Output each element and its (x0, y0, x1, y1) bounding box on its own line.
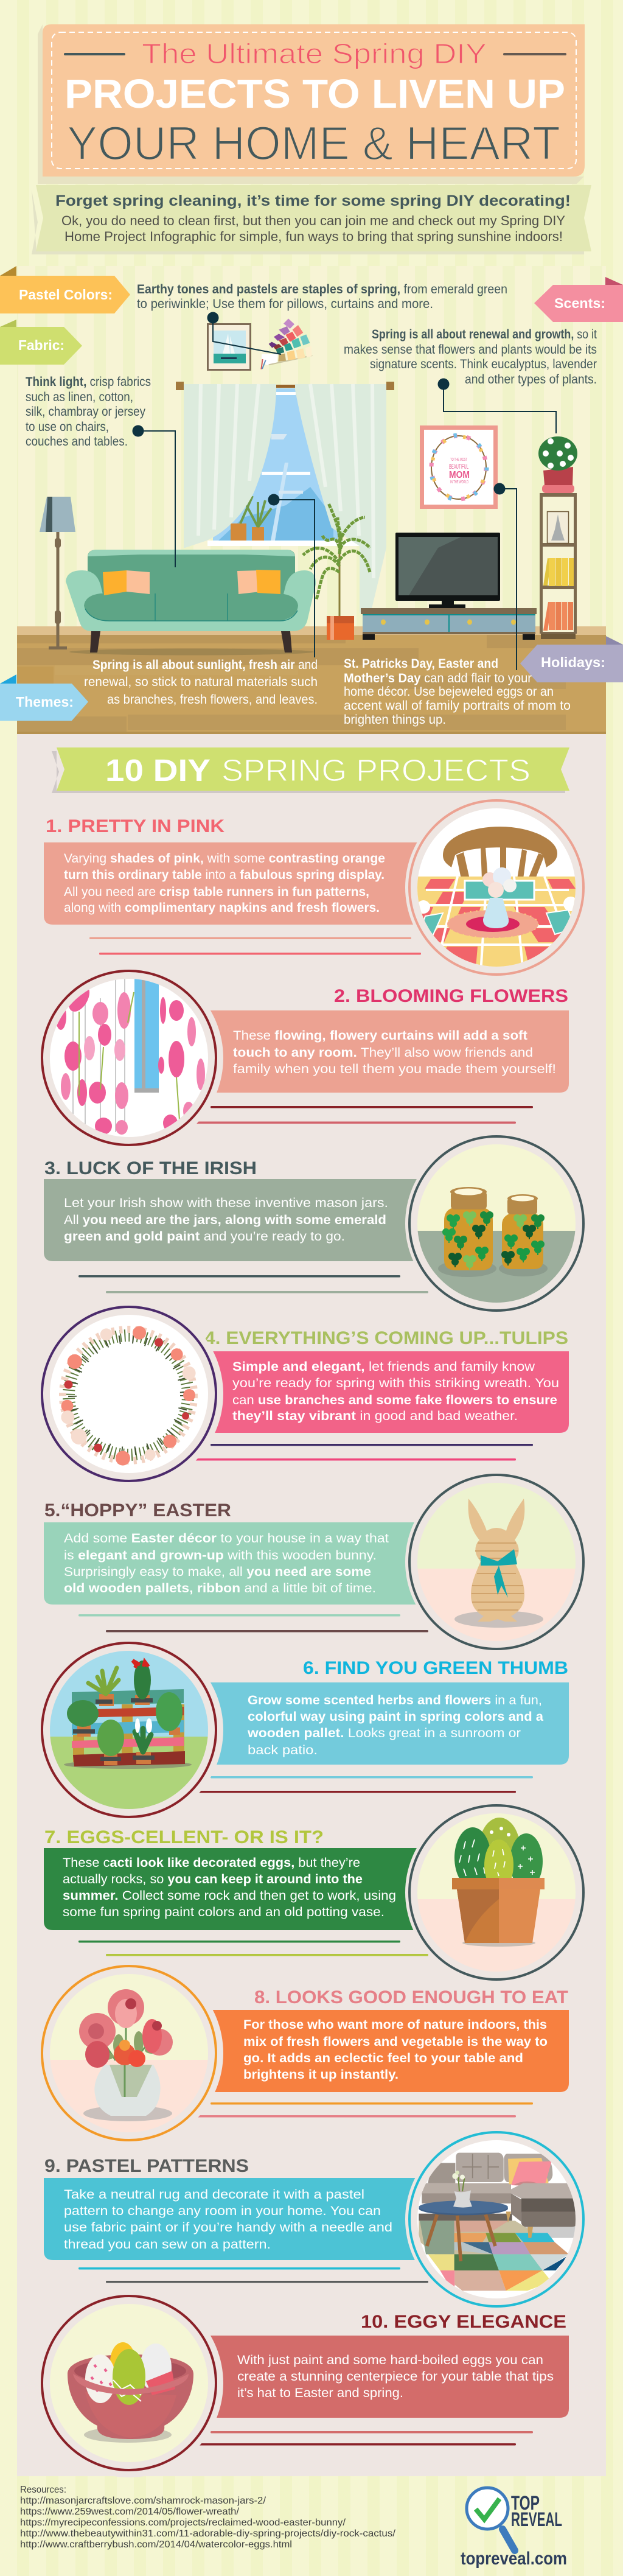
tab: pastel colors (0, 266, 130, 313)
project 9 card (44, 2178, 426, 2260)
tab: scents (534, 277, 623, 322)
text: scents: and other types of plants. (465, 372, 597, 387)
project 7 text: These cacti look like decorated eggs, but they’re (63, 1855, 360, 1870)
project 9 heading: 9. PASTEL PATTERNS (44, 2156, 249, 2176)
tab: holidays (520, 636, 623, 682)
text: themes: Spring is all about sunlight, fresh air and (92, 657, 318, 672)
project 1 (44, 796, 588, 979)
potted palm (303, 503, 370, 640)
project 7 (44, 1801, 588, 1984)
resources list (20, 2485, 396, 2550)
project 6 (35, 1636, 569, 1824)
text: themes: renewal, so stick to natural materials such (84, 674, 318, 689)
project 1 text: All you need are crisp table runners in fun patterns, (64, 884, 369, 899)
text: holidays: home décor. Use bejeweled eggs or an (344, 684, 554, 699)
living room wall (17, 266, 606, 626)
project 10 text: With just paint and some hard-boiled eggs you can (237, 2353, 543, 2367)
project 7 text: summer. Collect some rock and then get to work, using (63, 1888, 396, 1903)
title line 1: The Ultimate Spring DIY (142, 38, 487, 69)
logo: Top Reveal: REVEAL (511, 2508, 562, 2530)
text: fabric (26, 374, 151, 449)
project 3 text (64, 1195, 388, 1244)
text: fabric: couches and tables. (26, 434, 128, 449)
project 6 text (247, 1693, 544, 1757)
project 5 card (44, 1522, 426, 1605)
intro ribbon: Home Project Infographic for simple, fun ways to bring that spring sunshine indoors! (64, 229, 563, 244)
project 8 (35, 1959, 569, 2147)
project 7 image: cactus rocks (409, 1805, 584, 1979)
project 7 text: some fun spring paint colors and an old potting vase. (63, 1905, 385, 1919)
project 2 heading: 2. BLOOMING FLOWERS (334, 986, 568, 1006)
tab: scents: Scents: (554, 295, 605, 311)
project 4 text (232, 1359, 559, 1423)
project 9 text: Take a neutral rug and decorate it with a pastel (64, 2187, 364, 2202)
project 6 card (195, 1682, 569, 1765)
project 2 text: family when you tell them you made them yourself! (233, 1062, 556, 1076)
project 10 (35, 2289, 569, 2477)
project 10 text (237, 2353, 554, 2400)
pink framed wreath print: BEAUTIFUL (449, 463, 468, 471)
logo: Top Reveal: topreveal.com (461, 2549, 567, 2569)
project 2 text: These flowing, flowery curtains will add a soft (233, 1028, 527, 1043)
text: themes (84, 657, 318, 707)
room illustration (17, 318, 606, 734)
pink framed wreath print: MOM (449, 470, 470, 480)
project 10 heading: 10. EGGY ELEGANCE (361, 2312, 566, 2332)
text: holidays: accent wall of family portraits of mom to (344, 698, 571, 713)
project 5 heading: 5.“HOPPY” EASTER (44, 1500, 231, 1521)
resources list: Resources: (20, 2485, 66, 2495)
text: fabric: Think light, crisp fabrics (26, 374, 151, 389)
project 6 text: back patio. (248, 1743, 318, 1757)
project 8 card (195, 2010, 569, 2092)
project 7 text (63, 1855, 396, 1919)
project 8 text: For those who want more of nature indoors, this (243, 2017, 547, 2032)
project 5 text: is elegant and grown-up with this wooden bunny. (64, 1548, 377, 1563)
project 4 (35, 1300, 569, 1488)
project 4 card (195, 1351, 569, 1433)
floor lamp (40, 497, 75, 649)
project 3 card (44, 1179, 426, 1261)
project 3 image: mason jars (409, 1136, 584, 1311)
project 10 card (195, 2336, 569, 2418)
project 6 text: colorful way using paint in spring colors and a (248, 1709, 544, 1724)
text: holidays: Mother’s Day can add flair to your (344, 671, 532, 685)
window plants (231, 496, 271, 541)
project 8 heading: 8. LOOKS GOOD ENOUGH TO EAT (254, 1987, 568, 2007)
project 6 text: Grow some scented herbs and flowers in a fun, (248, 1693, 542, 1707)
project 4 text: Simple and elegant, let friends and family know (232, 1359, 535, 1374)
project 10 text: create a stunning centerpiece for your table that tips (237, 2369, 554, 2384)
project 9 image: sofa and pastel rug (409, 2132, 583, 2306)
text: holidays: St. Patricks Day, Easter and (344, 656, 498, 671)
picture frame: sailboat (208, 324, 251, 370)
project 5 text: old wooden pallets, ribbon and a little bit of time. (64, 1581, 376, 1595)
text: holidays: brighten things up. (344, 712, 446, 727)
project 3 text: green and gold paint and you’re ready to go. (64, 1229, 345, 1244)
project 6 heading: 6. FIND YOU GREEN THUMB (303, 1658, 568, 1678)
project 4 text: you’re ready for spring with this striking wreath. You (232, 1376, 559, 1390)
project 1 text: along with complimentary napkins and fresh flowers. (64, 900, 380, 915)
text: pastel colors (137, 282, 507, 311)
section banner: 10 DIY (105, 753, 211, 788)
bookshelf (540, 493, 577, 639)
text: pastel colors: to periwinkle; Use them for pillows, curtains and more. (137, 296, 433, 311)
text: scents: Spring is all about renewal and growth, so it (372, 327, 597, 341)
project 1 text (64, 851, 385, 915)
pink framed wreath print: TO THE MOST (450, 458, 467, 462)
project 9 text: pattern to change any room in your home. You can (64, 2203, 381, 2218)
project 5 text: Add some Easter décor to your house in a way that (64, 1531, 389, 1545)
paint swatch fan (261, 318, 312, 369)
text: scents: makes sense that flowers and plants would be its (344, 342, 597, 357)
project 5 image: wooden bunny (409, 1475, 584, 1649)
tab: fabric (0, 320, 82, 365)
tab: fabric: Fabric: (18, 337, 64, 353)
floor (17, 626, 606, 734)
project 2 (35, 964, 569, 1152)
project 2 text (233, 1028, 556, 1076)
project 6 text: wooden pallet. Looks great in a sunroom or (247, 1726, 521, 1740)
project 5 text (64, 1531, 389, 1595)
project 3 text: Let your Irish show with these inventive mason jars. (64, 1195, 388, 1210)
project 8 text: mix of fresh flowers and vegetable is the way to (243, 2034, 548, 2049)
project 10 image: eggs in bowl (42, 2296, 216, 2470)
curtain rod (176, 382, 394, 390)
project 7 text: actually rocks, so you can keep it around into the (63, 1872, 363, 1886)
section banner: SPRING PROJECTS (221, 753, 531, 788)
icon: magnifier with check (467, 2488, 515, 2550)
window (207, 388, 367, 546)
project 4 image: floral wreath (42, 1307, 216, 1481)
intro ribbon (32, 185, 591, 254)
project 3 text: All you need are the jars, along with some emerald (64, 1213, 386, 1227)
project 3 (44, 1132, 588, 1315)
project 6 image: pallet garden (42, 1643, 216, 1822)
project 1 card (44, 842, 426, 925)
project 9 text: thread you can sew on a pattern. (64, 2237, 271, 2252)
project 10 text: it’s hat to Easter and spring. (237, 2385, 403, 2400)
project 2 image: floral curtains (42, 971, 216, 1145)
tab: pastel colors: Pastel Colors: (19, 287, 113, 303)
title line 3: YOUR HOME & HEART (67, 116, 560, 170)
text: fabric: silk, chambray or jersey (26, 404, 145, 419)
project 8 image: bouquet in vase (42, 1966, 216, 2140)
sofa (66, 550, 316, 655)
text: scents (344, 327, 597, 387)
project 7 card (44, 1848, 426, 1930)
logo: Top Reveal: TOP (511, 2492, 540, 2514)
project 9 text: use fabric paint or if you’re handy with a needle and (64, 2220, 392, 2235)
resources list: http://www.thebeautywithin31.com/11-adorable-diy-spring-projects/diy-rock-cactus/ (20, 2529, 396, 2539)
project 9 text (64, 2187, 392, 2252)
text: fabric: such as linen, cotton, (26, 390, 133, 404)
project 1 image: table setting (409, 800, 584, 975)
project 4 heading: 4. EVERYTHING’S COMING UP...TULIPS (204, 1328, 568, 1348)
project 5 text: Surprisingly easy to make, all you need are some (64, 1564, 371, 1579)
flower pot on shelf (538, 436, 577, 493)
project 8 text: go. It adds an eclectic feel to your table and (243, 2051, 523, 2065)
section banner (52, 747, 569, 793)
pink framed wreath print (422, 427, 495, 506)
resources list: https://myrecipeconfessions.com/projects/reclaimed-wood-easter-bunny/ (20, 2518, 346, 2528)
text: fabric: to use on chairs, (26, 419, 109, 434)
project 3 heading: 3. LUCK OF THE IRISH (44, 1158, 257, 1178)
project 8 text: brightens it up instantly. (243, 2067, 399, 2082)
title line 2: PROJECTS TO LIVEN UP (64, 71, 565, 117)
pink framed wreath print: IN THE WORLD (450, 480, 468, 485)
resources list: http://masonjarcraftslove.com/shamrock-mason-jars-2/ (20, 2496, 266, 2506)
project 1 text: Varying shades of pink, with some contrasting orange (64, 851, 385, 866)
tab: themes: Themes: (16, 694, 74, 710)
curtains (184, 384, 386, 613)
text: pastel colors: Earthy tones and pastels are staples of spring, from emerald green (137, 282, 507, 296)
project 4 text: they’ll stay vibrant in good and bad weather. (232, 1409, 518, 1423)
resources list: http://www.craftberrybush.com/2014/04/watercolor-eggs.html (20, 2539, 292, 2550)
text: holidays (344, 656, 571, 727)
callout leader lines (133, 312, 556, 670)
project 7 heading: 7. EGGS-CELLENT- OR IS IT? (44, 1827, 324, 1847)
projects panel background (17, 734, 606, 2476)
resources list: https://www.259west.com/2014/05/flower-wreath/ (20, 2507, 240, 2517)
project 2 text: touch to any room. They’ll also wow friends and (233, 1045, 533, 1060)
project 8 text (243, 2017, 548, 2082)
media console (361, 608, 537, 640)
project 1 heading: 1. PRETTY IN PINK (46, 816, 224, 836)
tab: holidays: Holidays: (541, 654, 605, 670)
text: themes: as branches, fresh flowers, and leaves. (107, 692, 318, 707)
intro heading: Forget spring cleaning, it’s time for some spring DIY decorating! (55, 192, 571, 209)
project 4 text: can use branches and some fake flowers to ensure (232, 1393, 557, 1407)
tab: themes (0, 674, 88, 721)
text: scents: signature scents. Think eucalyptus, lavender (370, 357, 597, 371)
logo: Top Reveal (461, 2488, 567, 2569)
project 5 (44, 1471, 588, 1653)
project 2 card (195, 1010, 569, 1093)
header panel (38, 24, 585, 184)
television (395, 533, 500, 608)
project 1 text: turn this ordinary table into a fabulous spring display. (64, 867, 385, 882)
project 9 (44, 2128, 588, 2311)
intro body: Ok, you do need to clean first, but then you can join me and check out my Spring DIY (61, 213, 565, 228)
